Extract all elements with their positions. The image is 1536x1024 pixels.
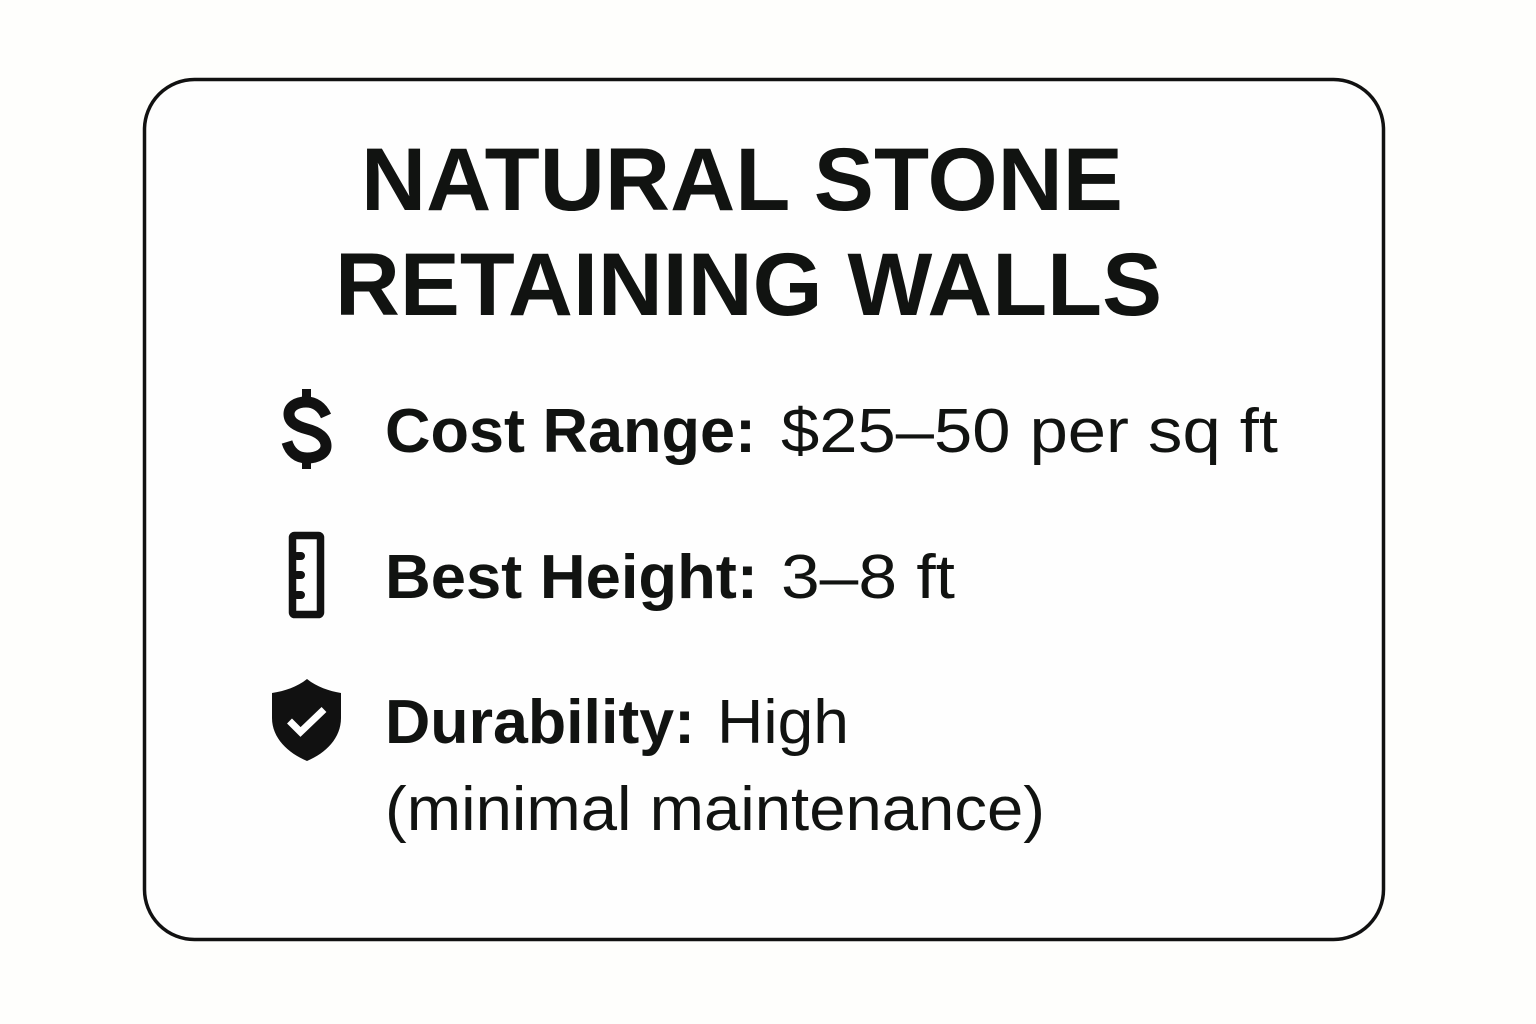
panel: card (144, 80, 1384, 940)
row: cost range: $25–50 per sq ft (781, 397, 1278, 466)
row: best height (385, 543, 955, 612)
row: durability (385, 688, 1045, 844)
row: durability: Durability: (385, 688, 695, 757)
row: durability: (minimal maintenance) (385, 775, 1045, 844)
title (335, 129, 1162, 334)
icon: dollar sign (287, 389, 326, 469)
row: cost range: Cost Range: (385, 397, 756, 466)
title: RETAINING WALLS (335, 234, 1162, 334)
title: NATURAL STONE (361, 129, 1123, 229)
icon: ruler (292, 536, 320, 614)
row: best height: 3–8 ft (781, 543, 955, 612)
row: cost range (385, 397, 1278, 466)
icon: shield with check (272, 679, 341, 761)
row: durability: High (717, 688, 849, 757)
row: best height: Best Height: (385, 543, 758, 612)
